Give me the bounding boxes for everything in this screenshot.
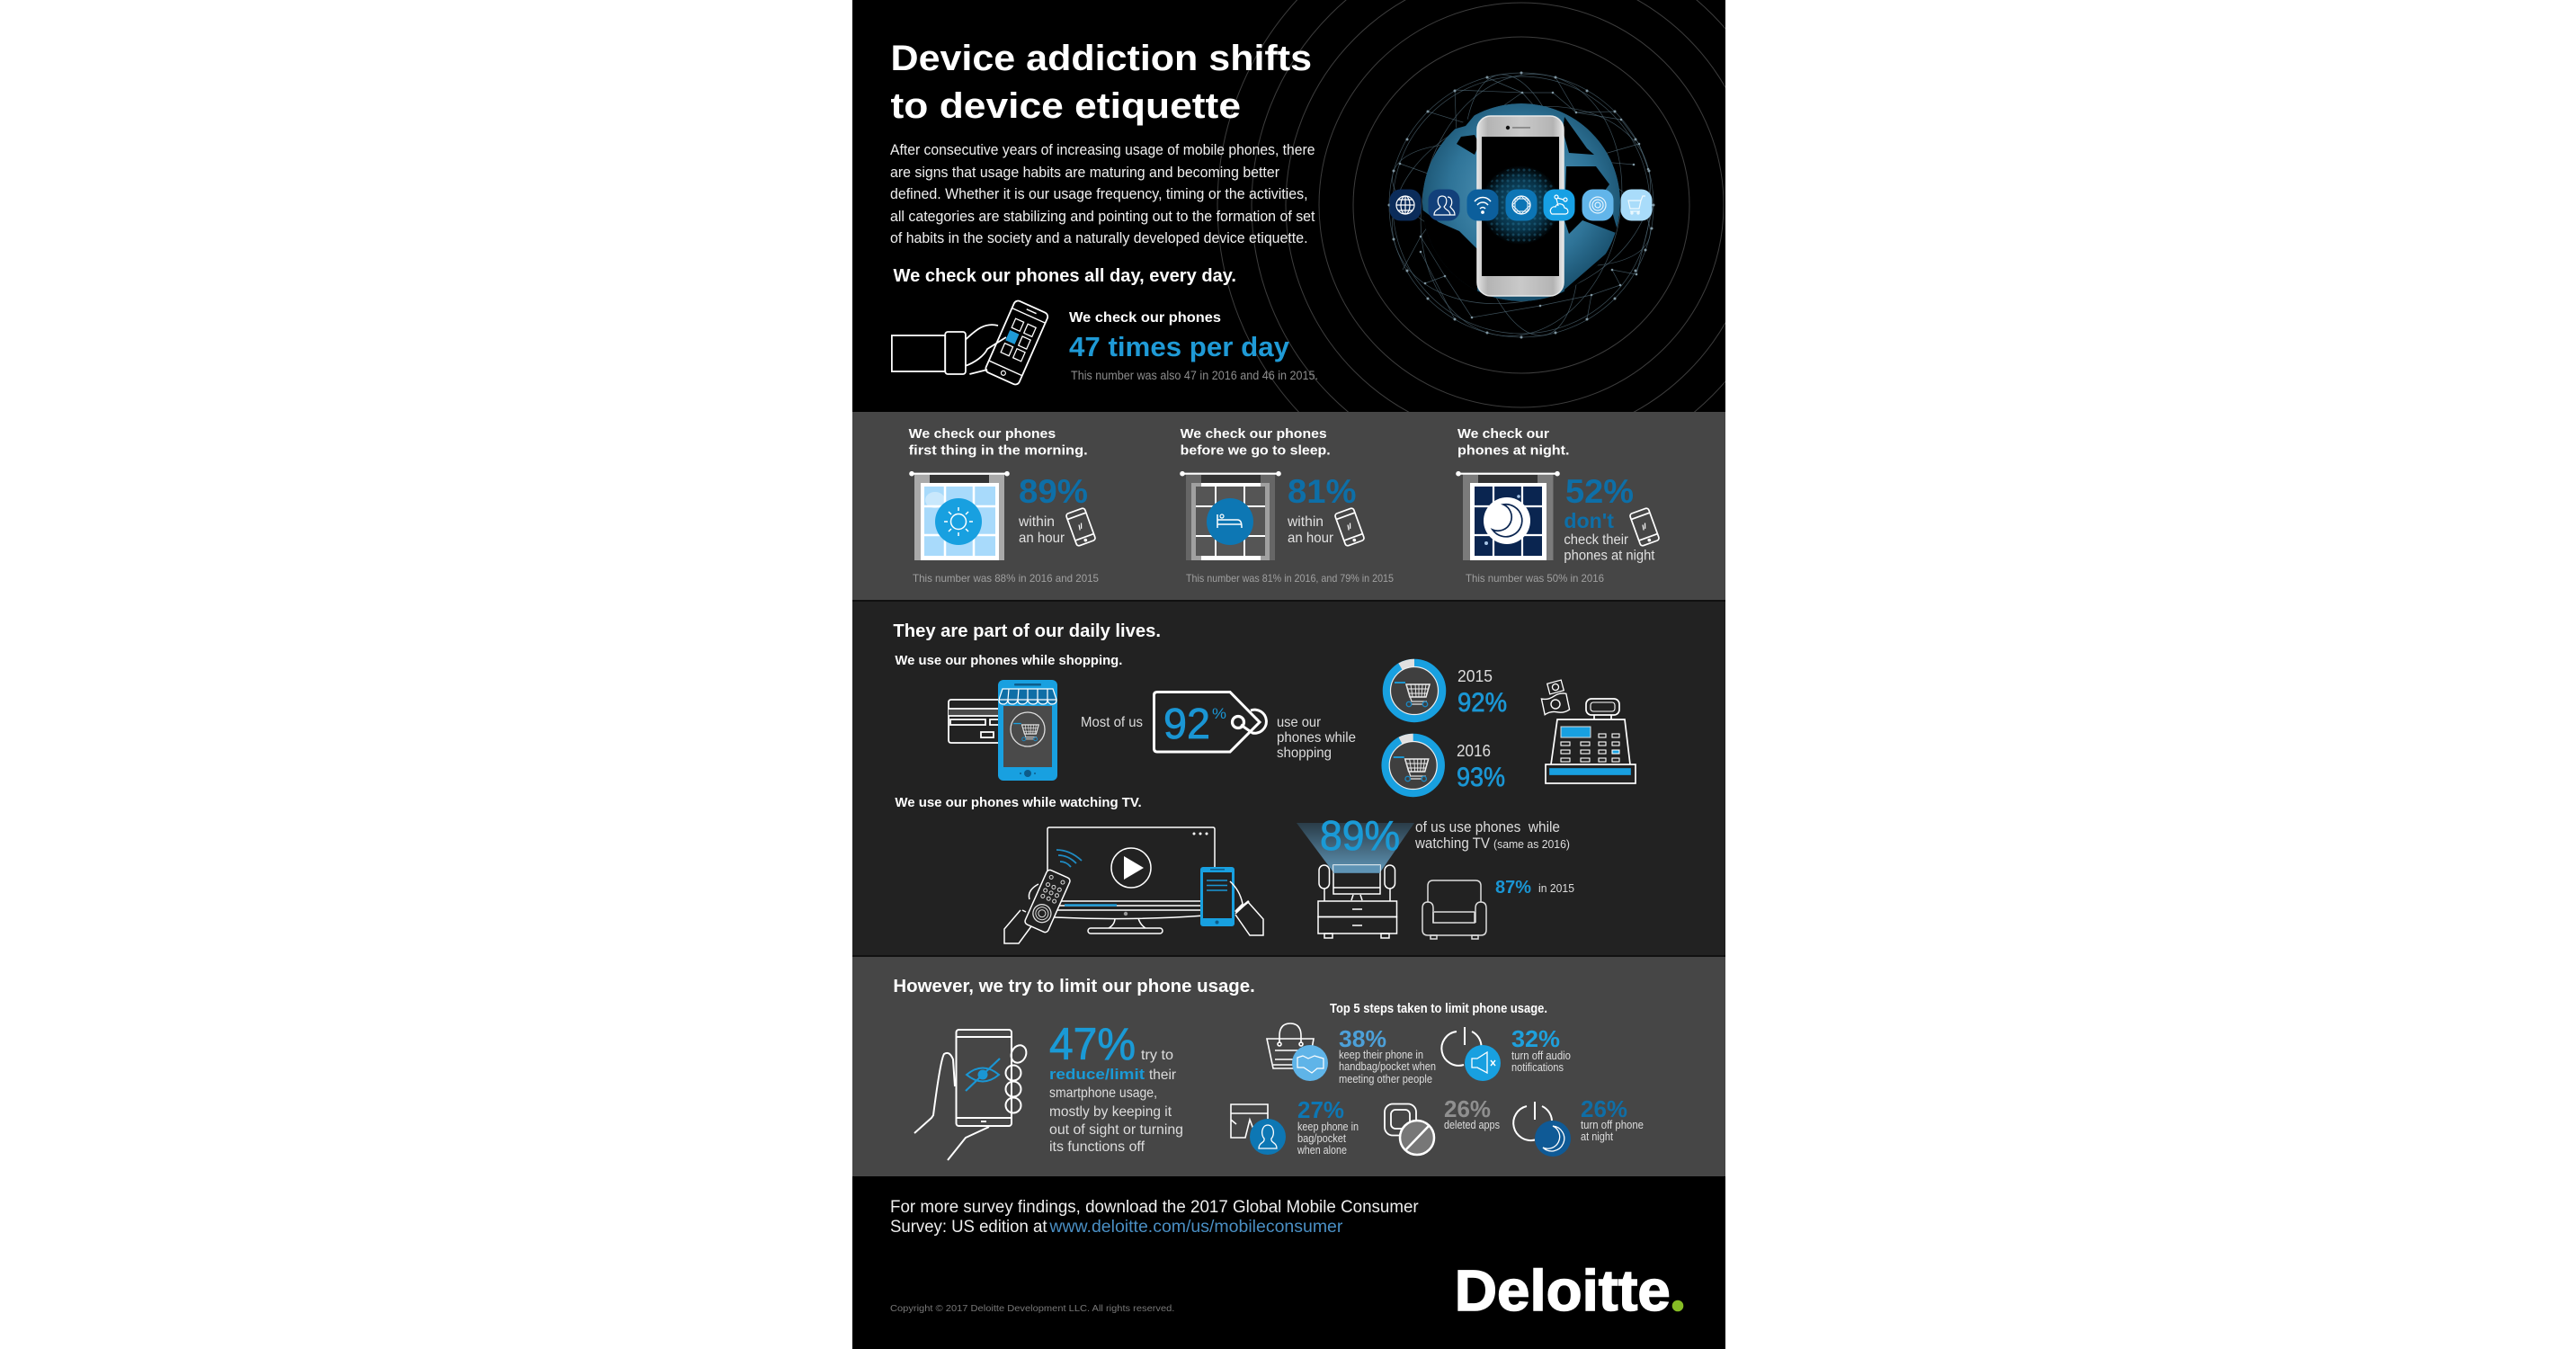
stat: 47% reduce/limit: 47% bbox=[1049, 1019, 1136, 1069]
stat: 87% in 2015: in 2015 bbox=[1538, 881, 1574, 895]
intro paragraph: defined. Whether it is our usage frequency, timing or the activities, bbox=[890, 186, 1307, 202]
step: phone off at night 26%: turn off phone bbox=[1581, 1119, 1644, 1131]
stat: 47% reduce/limit: try to bbox=[1141, 1048, 1173, 1063]
icon: tv cabinet bbox=[1318, 865, 1397, 938]
call to action: For more survey findings, download the 2017 Global Mobile Consumer bbox=[890, 1198, 1419, 1217]
icon: bedtime window bbox=[1180, 471, 1281, 560]
donut: 2015: 2015 bbox=[1457, 667, 1493, 685]
stat: 47 times per day: We check our phones bbox=[1069, 310, 1221, 326]
icon: hand holding phone bbox=[892, 299, 1049, 386]
stat: 47 times per day: This number was also 47 in 2016 and 46 in 2015. bbox=[1071, 369, 1318, 382]
subheading: all day: We check our phones all day, every day. bbox=[894, 266, 1236, 286]
icon: night window bbox=[1456, 471, 1560, 560]
call to action: Survey: US edition at bbox=[890, 1218, 1047, 1237]
heading: top 5 steps: Top 5 steps taken to limit phone usage. bbox=[1330, 1002, 1547, 1016]
title: Device addiction shifts bbox=[890, 39, 1312, 78]
column: morning: We check our phones bbox=[909, 426, 1056, 442]
column: at night: This number was 50% in 2016 bbox=[1466, 572, 1604, 585]
intro paragraph bbox=[890, 142, 1315, 246]
stat: 47% reduce/limit: reduce/limit bbox=[1049, 1066, 1145, 1083]
donut: 2016: 93% bbox=[1457, 763, 1505, 792]
column: before sleep: within bbox=[1287, 514, 1324, 530]
step: phone off at night 26%: at night bbox=[1581, 1130, 1613, 1143]
step: shorts 27% bbox=[1231, 1096, 1359, 1157]
stat: 89% watching TV: of us use phones while bbox=[1415, 818, 1560, 835]
stat: 89% watching TV: watching TV bbox=[1414, 835, 1491, 852]
text: most of us: Most of us bbox=[1081, 715, 1143, 730]
column: at night: check their bbox=[1564, 532, 1628, 548]
step: phone off at night 26% bbox=[1513, 1095, 1644, 1157]
icon: hand holding phone with hidden eye bbox=[914, 1030, 1029, 1160]
icon: credit card bbox=[949, 700, 998, 743]
step: shorts 27%: 27% bbox=[1297, 1096, 1344, 1123]
icon: cash register bbox=[1541, 680, 1636, 783]
step: handbag 38%: keep their phone in bbox=[1339, 1049, 1423, 1061]
step: handbag 38%: 38% bbox=[1339, 1025, 1386, 1052]
price tag: 92%: % bbox=[1212, 705, 1226, 722]
illustration: globe with phone and app icons bbox=[1388, 72, 1654, 338]
icon: morning window bbox=[909, 471, 1010, 560]
step: handbag 38% bbox=[1267, 1023, 1436, 1085]
column: at night: 52% bbox=[1565, 473, 1634, 510]
column: before sleep: 81% bbox=[1288, 473, 1356, 510]
step: audio off 32%: 32% bbox=[1511, 1025, 1560, 1052]
step: deleted apps 26%: 26% bbox=[1444, 1095, 1491, 1122]
panel: daily checks bbox=[852, 412, 1725, 602]
stat: 47% reduce/limit: out of sight or turning bbox=[1049, 1122, 1183, 1138]
price tag: 92%: 92 bbox=[1163, 701, 1210, 748]
text: use our phones while shopping: shopping bbox=[1277, 746, 1332, 761]
stat: 47% reduce/limit bbox=[1049, 1019, 1183, 1155]
heading: daily lives: They are part of our daily lives. bbox=[893, 621, 1161, 641]
stat: 47% reduce/limit: smartphone usage, bbox=[1049, 1085, 1157, 1101]
column: morning: 89% bbox=[1019, 473, 1088, 510]
network sphere bbox=[1367, 55, 1676, 355]
title bbox=[890, 39, 1312, 126]
app icon row bbox=[1390, 189, 1653, 221]
intro paragraph: all categories are stabilizing and pointing out to the formation of set bbox=[890, 209, 1315, 225]
stat: 89% watching TV: (same as 2016) bbox=[1493, 837, 1570, 851]
panel: daily lives bbox=[852, 602, 1725, 956]
column: morning: This number was 88% in 2016 and 2015 bbox=[913, 572, 1099, 585]
earth bbox=[1422, 103, 1620, 301]
panel: footer bbox=[852, 1176, 1725, 1349]
step: audio off 32%: notifications bbox=[1511, 1061, 1564, 1074]
step: phone off at night 26%: 26% bbox=[1581, 1095, 1627, 1122]
stat: 89% watching TV: 89% bbox=[1320, 812, 1400, 859]
donut: 2015 bbox=[1386, 663, 1507, 719]
column: at night: We check our bbox=[1457, 426, 1549, 442]
step: deleted apps 26%: deleted apps bbox=[1444, 1119, 1500, 1131]
stat: 87% in 2015: 87% bbox=[1495, 878, 1531, 898]
intro paragraph: After consecutive years of increasing usage of mobile phones, there bbox=[890, 142, 1315, 158]
column: before sleep: an hour bbox=[1288, 531, 1334, 546]
donut: 2016 bbox=[1386, 737, 1505, 793]
heading: limit usage: However, we try to limit our phone usage. bbox=[893, 977, 1255, 996]
panel: header bbox=[852, 0, 1725, 412]
phone bbox=[1477, 116, 1564, 296]
stat: 47% reduce/limit: its functions off bbox=[1049, 1139, 1145, 1155]
stat: 89% watching TV bbox=[1297, 812, 1570, 872]
call to action: www.deloitte.com/us/mobileconsumer bbox=[1048, 1218, 1343, 1237]
column: before sleep: before we go to sleep. bbox=[1181, 442, 1331, 459]
text: use our phones while shopping: phones while bbox=[1277, 730, 1356, 746]
logo: Deloitte: Deloitte bbox=[1455, 1258, 1671, 1323]
column: at night: phones at night. bbox=[1457, 442, 1570, 459]
text: use our phones while shopping: use our bbox=[1277, 715, 1322, 730]
stat: 87% in 2015 bbox=[1495, 878, 1574, 898]
column: before sleep: We check our phones bbox=[1181, 426, 1327, 442]
icon: shop phone bbox=[998, 680, 1057, 781]
column: at night: phones at night bbox=[1564, 549, 1655, 564]
stat: 47% reduce/limit: mostly by keeping it bbox=[1049, 1104, 1172, 1120]
copyright: Copyright © 2017 Deloitte Development LLC. All rights reserved. bbox=[890, 1303, 1174, 1314]
call to action bbox=[890, 1198, 1419, 1237]
column: morning: within bbox=[1018, 514, 1055, 530]
column: morning: first thing in the morning. bbox=[909, 442, 1088, 459]
panel: limiting usage bbox=[852, 955, 1725, 1176]
stat: 47 times per day bbox=[1069, 310, 1318, 382]
donut: 2016: 2016 bbox=[1457, 742, 1491, 760]
column: before sleep bbox=[1180, 426, 1394, 585]
title: to device etiquette bbox=[890, 86, 1241, 126]
donut: 2015: 92% bbox=[1457, 688, 1507, 718]
column: morning bbox=[909, 426, 1099, 585]
intro paragraph: of habits in the society and a naturally developed device etiquette. bbox=[890, 230, 1307, 246]
step: shorts 27%: when alone bbox=[1297, 1144, 1347, 1157]
step: deleted apps 26% bbox=[1385, 1095, 1500, 1155]
text: use our phones while shopping bbox=[1277, 715, 1356, 761]
icon: armchair bbox=[1422, 880, 1486, 939]
subheading: shopping: We use our phones while shopping. bbox=[895, 654, 1122, 668]
subheading: watching TV: We use our phones while watching TV. bbox=[895, 796, 1142, 810]
step: shorts 27%: bag/pocket bbox=[1297, 1132, 1346, 1145]
step: shorts 27%: keep phone in bbox=[1297, 1121, 1359, 1133]
icon: tv with remote and phone bbox=[1004, 827, 1263, 943]
column: at night bbox=[1456, 426, 1660, 585]
price tag: 92% bbox=[1154, 692, 1266, 752]
step: handbag 38%: handbag/pocket when bbox=[1339, 1060, 1436, 1073]
column: before sleep: This number was 81% in 2016, and 79% in 2015 bbox=[1186, 572, 1394, 585]
intro paragraph: are signs that usage habits are maturing and becoming better bbox=[890, 165, 1279, 181]
step: handbag 38%: meeting other people bbox=[1339, 1073, 1432, 1085]
step: audio off 32% bbox=[1441, 1025, 1571, 1081]
stat: 47% reduce/limit: their bbox=[1149, 1068, 1177, 1083]
stat: 47 times per day: 47 times per day bbox=[1069, 331, 1290, 362]
column: morning: an hour bbox=[1019, 531, 1065, 546]
step: audio off 32%: turn off audio bbox=[1511, 1050, 1571, 1062]
column: at night: don't bbox=[1564, 509, 1614, 532]
